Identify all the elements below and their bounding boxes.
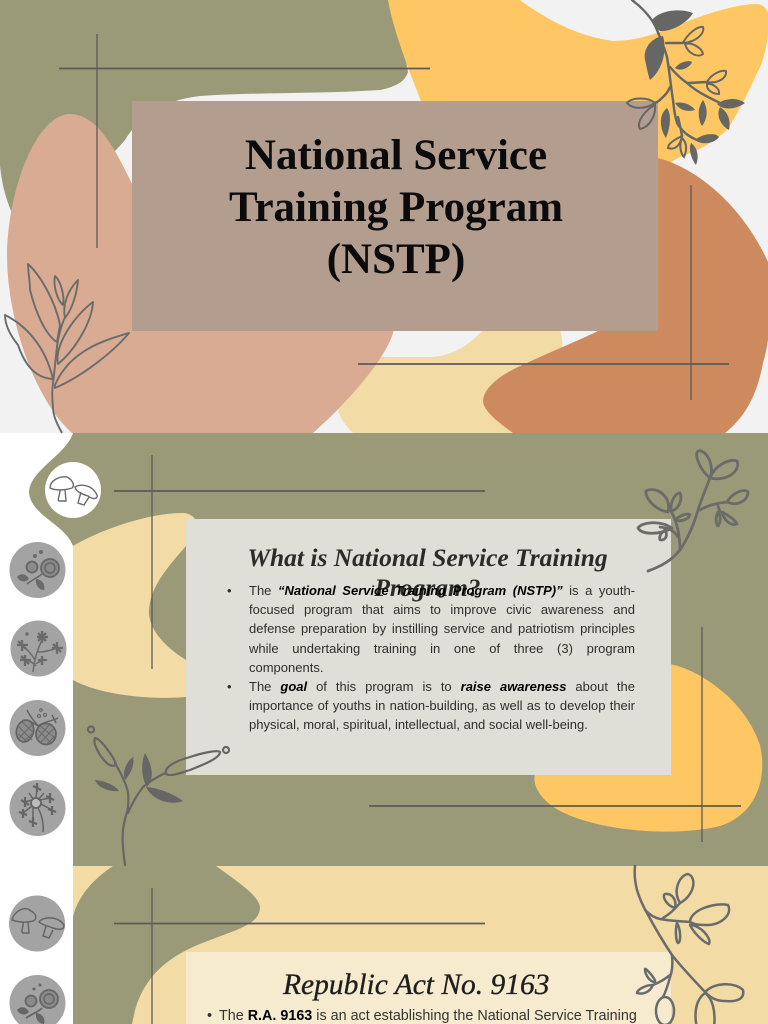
bullet list: definition and goal: physical, moral, spiritual, intellectual, and social well-being. [249, 717, 588, 732]
icon: dandelion thumb [19, 783, 56, 832]
title: (NSTP) [327, 236, 465, 283]
icon: rose thumb lower [17, 984, 58, 1024]
bullet list: definition and goal: defense preparation by instilling service and patriotism principles [249, 621, 635, 636]
title: Training Program [229, 184, 563, 231]
icon: mushroom thumb [12, 909, 64, 938]
icon: mushrooms white badge [50, 477, 97, 505]
icon: rose thumb [17, 550, 59, 590]
text: republic act first bullet: The R.A. 9163 is an act establishing the National Service Training [219, 1008, 637, 1024]
bullet list: definition and goal [227, 583, 635, 732]
heading: republic act: Republic Act No. 9163 [283, 969, 550, 1001]
title panel [132, 101, 658, 331]
bullet list: definition and goal: components. [249, 660, 323, 675]
title [229, 132, 563, 283]
text: republic act first bullet: • [207, 1008, 212, 1024]
content panel: republic act [186, 952, 671, 1024]
title: National Service [245, 132, 547, 179]
icon: flowers thumb [17, 631, 63, 672]
bullet list: definition and goal: while undertaking training in one of three (3) program [249, 641, 635, 656]
content panel: what is NSTP: • [227, 583, 232, 598]
icon: leaf sprig bottom left [4, 263, 130, 434]
content panel: what is NSTP [186, 519, 671, 775]
bullet list: definition and goal: importance of youths in nation-building, as well as to develop their [249, 698, 635, 713]
heading: what is NSTP: What is National Service Training Program? [247, 543, 608, 602]
bullet list: definition and goal: The “National Service Training Program (NSTP)” is a youth- [249, 583, 635, 598]
icon: leafy branch top right [626, 0, 745, 165]
icon: pine cones thumb [14, 709, 58, 744]
crosshair lines: slide 1 [59, 34, 729, 400]
content panel: what is NSTP: • [227, 679, 232, 694]
bullet list: definition and goal: focused program that aims to improve civic awareness and [249, 602, 635, 617]
bullet list: definition and goal: The goal of this program is to raise awareness about the [249, 679, 635, 694]
icon: white mushroom badge [45, 462, 101, 518]
